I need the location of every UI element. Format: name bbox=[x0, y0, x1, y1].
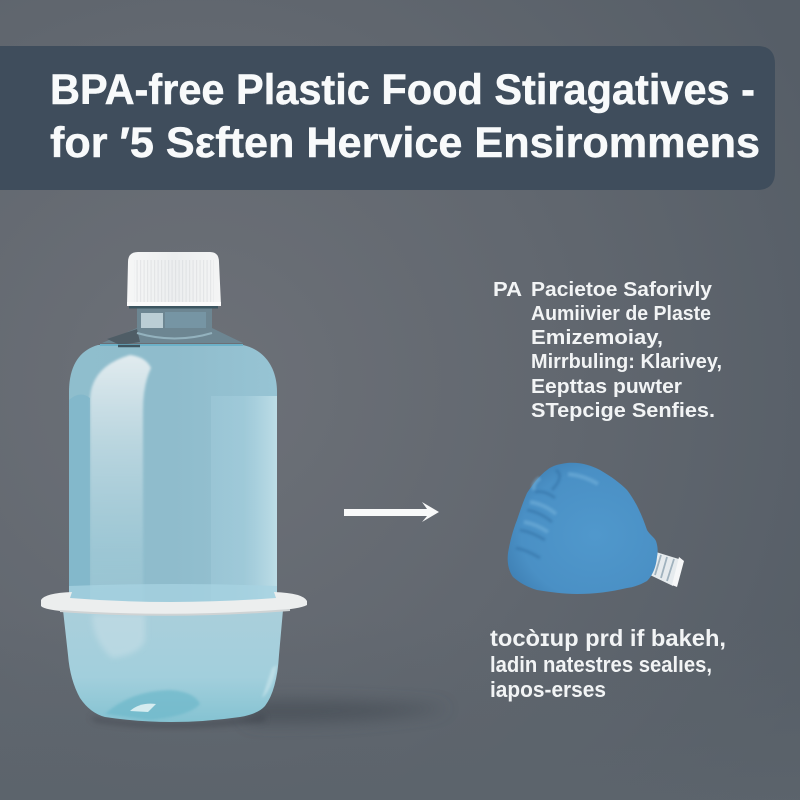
title banner bbox=[0, 46, 775, 190]
cup highlight bbox=[92, 614, 145, 658]
text block: bottom right: ladin natestres sealıes, bbox=[490, 652, 712, 677]
bottle cap bbox=[127, 252, 221, 305]
text block: top right bbox=[493, 279, 722, 422]
title text bbox=[50, 66, 760, 167]
text block: top right: PA bbox=[493, 279, 522, 301]
banner panel bbox=[0, 46, 775, 190]
right highlight bbox=[211, 396, 277, 604]
text block: top right: Emizemoiay, bbox=[531, 327, 663, 349]
lower cup bbox=[63, 610, 283, 722]
arrow bbox=[344, 502, 439, 522]
pouch folds bbox=[516, 470, 560, 558]
left edge band bbox=[69, 394, 90, 604]
text block: bottom right: tocòɪup prd if bakeh, bbox=[490, 625, 726, 651]
title text: for ′5 Sεften Hervice Ensirommens bbox=[50, 119, 760, 167]
nozzle bbox=[650, 552, 682, 586]
icon: blue silicone pouch with nozzle bbox=[508, 463, 684, 594]
bottle body bbox=[69, 345, 277, 606]
liquid band bbox=[69, 584, 277, 606]
cup shadow bbox=[240, 701, 450, 722]
bottle neck bbox=[102, 308, 243, 343]
bottle punt bbox=[105, 690, 200, 720]
text block: bottom right: iapos-erses bbox=[490, 677, 606, 702]
title text: BPA-free Plastic Food Stiragatives - bbox=[50, 66, 755, 114]
cup right gleam bbox=[262, 665, 277, 698]
text block: top right: STepcige Senfies. bbox=[531, 400, 715, 422]
text block: top right: Pacietoe Saforivly bbox=[531, 279, 713, 301]
text block: top right: Eepttas puwter bbox=[531, 376, 682, 398]
illustration: plastic bottle in cup bbox=[41, 252, 450, 728]
text block: bottom right bbox=[490, 625, 726, 702]
left highlight bbox=[90, 355, 151, 604]
text block: top right: Aumiivier de Plaste bbox=[531, 303, 711, 325]
water line bbox=[100, 344, 243, 346]
text block: top right: Mirrbuling: Klarivey, bbox=[531, 351, 722, 373]
pouch body bbox=[508, 463, 658, 594]
cup rim bbox=[41, 592, 307, 614]
